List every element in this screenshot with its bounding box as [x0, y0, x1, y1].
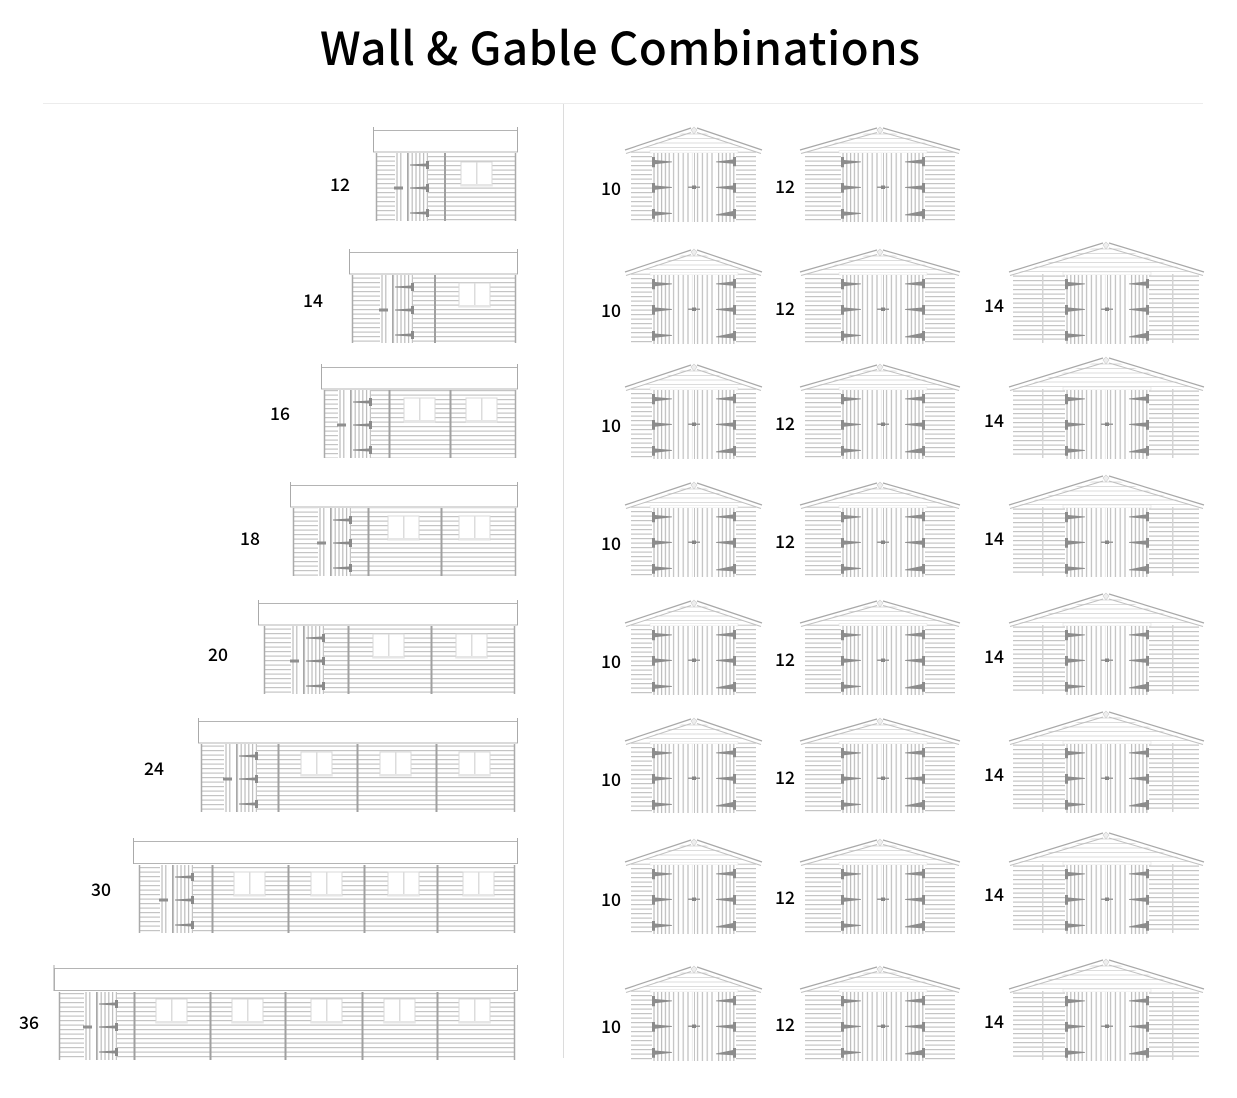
gable row for wall 24: 14 — [984, 762, 1004, 787]
wall 14 — [303, 249, 518, 343]
gable row for wall 16: 14 — [984, 408, 1004, 433]
wall 20: 20 — [208, 642, 228, 667]
panel: wall lengths — [19, 127, 518, 1060]
wall 24: 24 — [144, 756, 164, 781]
gable row for wall 20: 14 — [984, 644, 1004, 669]
gable row for wall 30: 12 — [775, 885, 795, 910]
gable row for wall 14: 10 — [601, 298, 621, 323]
gable row for wall 18: 12 — [775, 529, 795, 554]
wall 20 — [208, 600, 518, 694]
gable row for wall 20: 10 — [601, 649, 621, 674]
wall 14: 14 — [303, 288, 323, 313]
wall 16 — [270, 364, 518, 458]
gable row for wall 24 — [601, 711, 1204, 813]
gable row for wall 30 — [601, 832, 1204, 934]
wall 30: 30 — [91, 877, 111, 902]
gable row for wall 36: 12 — [775, 1012, 795, 1037]
wall 30 — [91, 838, 518, 933]
gable row for wall 24: 12 — [775, 765, 795, 790]
gable row for wall 20 — [601, 593, 1204, 695]
gable row for wall 18: 14 — [984, 526, 1004, 551]
wall 24 — [144, 718, 518, 812]
gable row for wall 12: 12 — [775, 174, 795, 199]
gable row for wall 20: 12 — [775, 647, 795, 672]
gable row for wall 18 — [601, 475, 1204, 577]
panel: gable widths — [601, 127, 1204, 1061]
gable row for wall 14 — [601, 242, 1204, 344]
gable row for wall 30: 14 — [984, 882, 1004, 907]
gable row for wall 12: 10 — [601, 176, 621, 201]
gable row for wall 30: 10 — [601, 887, 621, 912]
gable row for wall 16: 12 — [775, 411, 795, 436]
gable row for wall 16 — [601, 357, 1204, 459]
wall 18: 18 — [240, 526, 260, 551]
wall 36: 36 — [19, 1010, 39, 1035]
gable row for wall 36: 10 — [601, 1014, 621, 1039]
gable row for wall 16: 10 — [601, 413, 621, 438]
wall 36 — [19, 965, 518, 1060]
wall 12 — [330, 127, 518, 221]
wall 12: 12 — [330, 172, 350, 197]
gable row for wall 14: 12 — [775, 296, 795, 321]
gable row for wall 36 — [601, 959, 1204, 1061]
gable row for wall 36: 14 — [984, 1009, 1004, 1034]
title: Wall & Gable Combinations — [320, 13, 920, 79]
gable row for wall 12 — [601, 127, 960, 222]
gable row for wall 14: 14 — [984, 293, 1004, 318]
wall 16: 16 — [270, 401, 290, 426]
gable row for wall 24: 10 — [601, 767, 621, 792]
wall 18 — [240, 482, 518, 576]
gable row for wall 18: 10 — [601, 531, 621, 556]
